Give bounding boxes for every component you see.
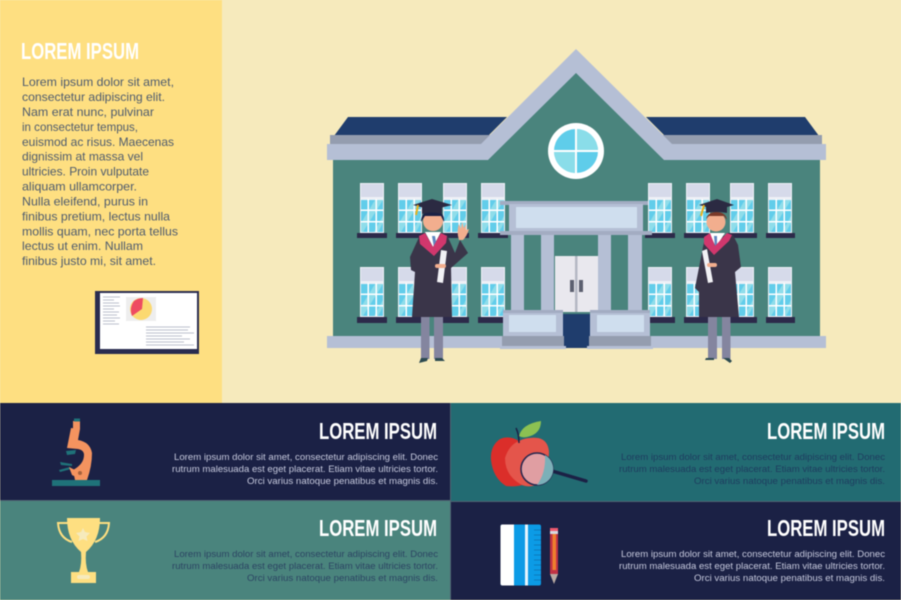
- text block: Orci varius natoque penatibus et magnis dis.: [694, 573, 885, 584]
- holding hand: [707, 263, 717, 267]
- text block: Lorem ipsum dolor sit amet, consectetur adipiscing elit. Donec: [621, 549, 885, 560]
- ground strip: [327, 336, 826, 348]
- building wall: [333, 158, 820, 338]
- text block: [619, 549, 885, 584]
- lower windows: left wing: [357, 267, 508, 323]
- figure: graduate waving: [410, 199, 469, 363]
- lower windows: right wing: [645, 267, 795, 323]
- illustration: school building: [327, 49, 826, 349]
- mortarboard: [413, 199, 452, 210]
- panel: trophy: [0, 501, 450, 600]
- icon: pencil: [550, 528, 558, 584]
- text block: Lorem ipsum dolor sit amet, consectetur adipiscing elit. Donec: [621, 452, 885, 463]
- gown: [695, 235, 741, 317]
- text block: rutrum malesuada est eget placerat. Etiam vitae ultricies tortor.: [172, 464, 438, 475]
- hand waving: [458, 222, 469, 240]
- heading: LOREM IPSUM: [319, 515, 437, 541]
- text block: rutrum malesuada est eget placerat. Etiam vitae ultricies tortor.: [172, 561, 438, 572]
- holding hand: [435, 264, 446, 268]
- text block: intro: aliquam ullamcorper.: [22, 180, 137, 194]
- right plinth and steps: [587, 310, 653, 349]
- roof fascia: [330, 135, 822, 145]
- cornice: [327, 144, 826, 160]
- text block: Orci varius natoque penatibus et magnis dis.: [694, 476, 885, 487]
- panel: intro text: [0, 0, 222, 403]
- icon: book: [500, 524, 541, 586]
- diploma: [702, 249, 713, 283]
- diploma: [437, 250, 447, 283]
- portico entablature: [500, 201, 652, 235]
- face: [423, 211, 443, 231]
- icon: apple and magnifier: [491, 421, 586, 486]
- gown: [410, 235, 468, 317]
- text block: intro: consectetur adipiscing elit.: [22, 90, 165, 104]
- text block: intro: mollis quam, nec porta tellus: [22, 224, 178, 238]
- left plinth and steps: [500, 310, 566, 349]
- upper windows: left wing: [357, 183, 508, 238]
- doors: [555, 256, 598, 312]
- text block: Lorem ipsum dolor sit amet, consectetur adipiscing elit. Donec: [174, 452, 438, 463]
- gable face: [488, 73, 664, 160]
- text block: intro: Lorem ipsum dolor sit amet,: [22, 75, 174, 89]
- tassel: [701, 205, 704, 216]
- text block: intro: finibus justo mi, sit amet.: [22, 254, 156, 268]
- gable trim: [481, 49, 672, 160]
- text block: rutrum malesuada est eget placerat. Etiam vitae ultricies tortor.: [619, 464, 885, 475]
- text block: [172, 549, 438, 584]
- figure: graduate with diploma: [695, 199, 741, 363]
- columns: [511, 234, 642, 312]
- sash: [704, 233, 732, 255]
- icon: microscope: [52, 418, 100, 486]
- text block: intro: Nulla eleifend, purus in: [22, 194, 148, 208]
- text block: intro: Nam erat nunc, pulvinar: [22, 105, 154, 119]
- icon: tablet with pie chart: [95, 291, 199, 354]
- heading: LOREM IPSUM: [319, 418, 437, 444]
- hair: [421, 210, 444, 222]
- text block: Orci varius natoque penatibus et magnis dis.: [247, 476, 438, 487]
- text block: intro: euismod ac risus. Maecenas: [22, 135, 174, 149]
- text block: intro: lectus ut enim. Nullam: [22, 239, 143, 253]
- text block: intro: finibus pretium, lectus nulla: [22, 210, 170, 224]
- text block: [172, 452, 438, 487]
- upper windows: right wing: [645, 183, 795, 238]
- legs: [421, 317, 430, 359]
- text block: intro: [22, 75, 178, 268]
- mortarboard: [699, 199, 734, 210]
- neck and collar: [425, 232, 441, 247]
- round window: [548, 123, 604, 179]
- text block: rutrum malesuada est eget placerat. Etiam vitae ultricies tortor.: [619, 561, 885, 572]
- entrance path: [562, 314, 590, 348]
- hair: [706, 212, 727, 220]
- panel: book and pencil: [451, 502, 901, 600]
- icon: trophy: [58, 518, 109, 583]
- sash: [419, 233, 447, 256]
- legs: [708, 317, 717, 359]
- face: [706, 212, 726, 232]
- text block: intro: ultricies. Proin vulputate: [22, 164, 149, 178]
- text block: Orci varius natoque penatibus et magnis dis.: [247, 573, 438, 584]
- roof: right: [646, 117, 819, 136]
- roof: left: [334, 117, 507, 136]
- text block: [619, 452, 885, 487]
- text block: intro: dignissim at massa vel: [22, 150, 143, 164]
- panel: microscope: [0, 403, 450, 500]
- heading: intro: LOREM IPSUM: [21, 38, 139, 64]
- background: [0, 0, 901, 403]
- panel: apple: [451, 403, 901, 501]
- text block: intro: in consectetur tempus,: [22, 120, 138, 134]
- tassel: [416, 205, 418, 215]
- collar: [709, 233, 725, 247]
- text block: Lorem ipsum dolor sit amet, consectetur adipiscing elit. Donec: [174, 549, 438, 560]
